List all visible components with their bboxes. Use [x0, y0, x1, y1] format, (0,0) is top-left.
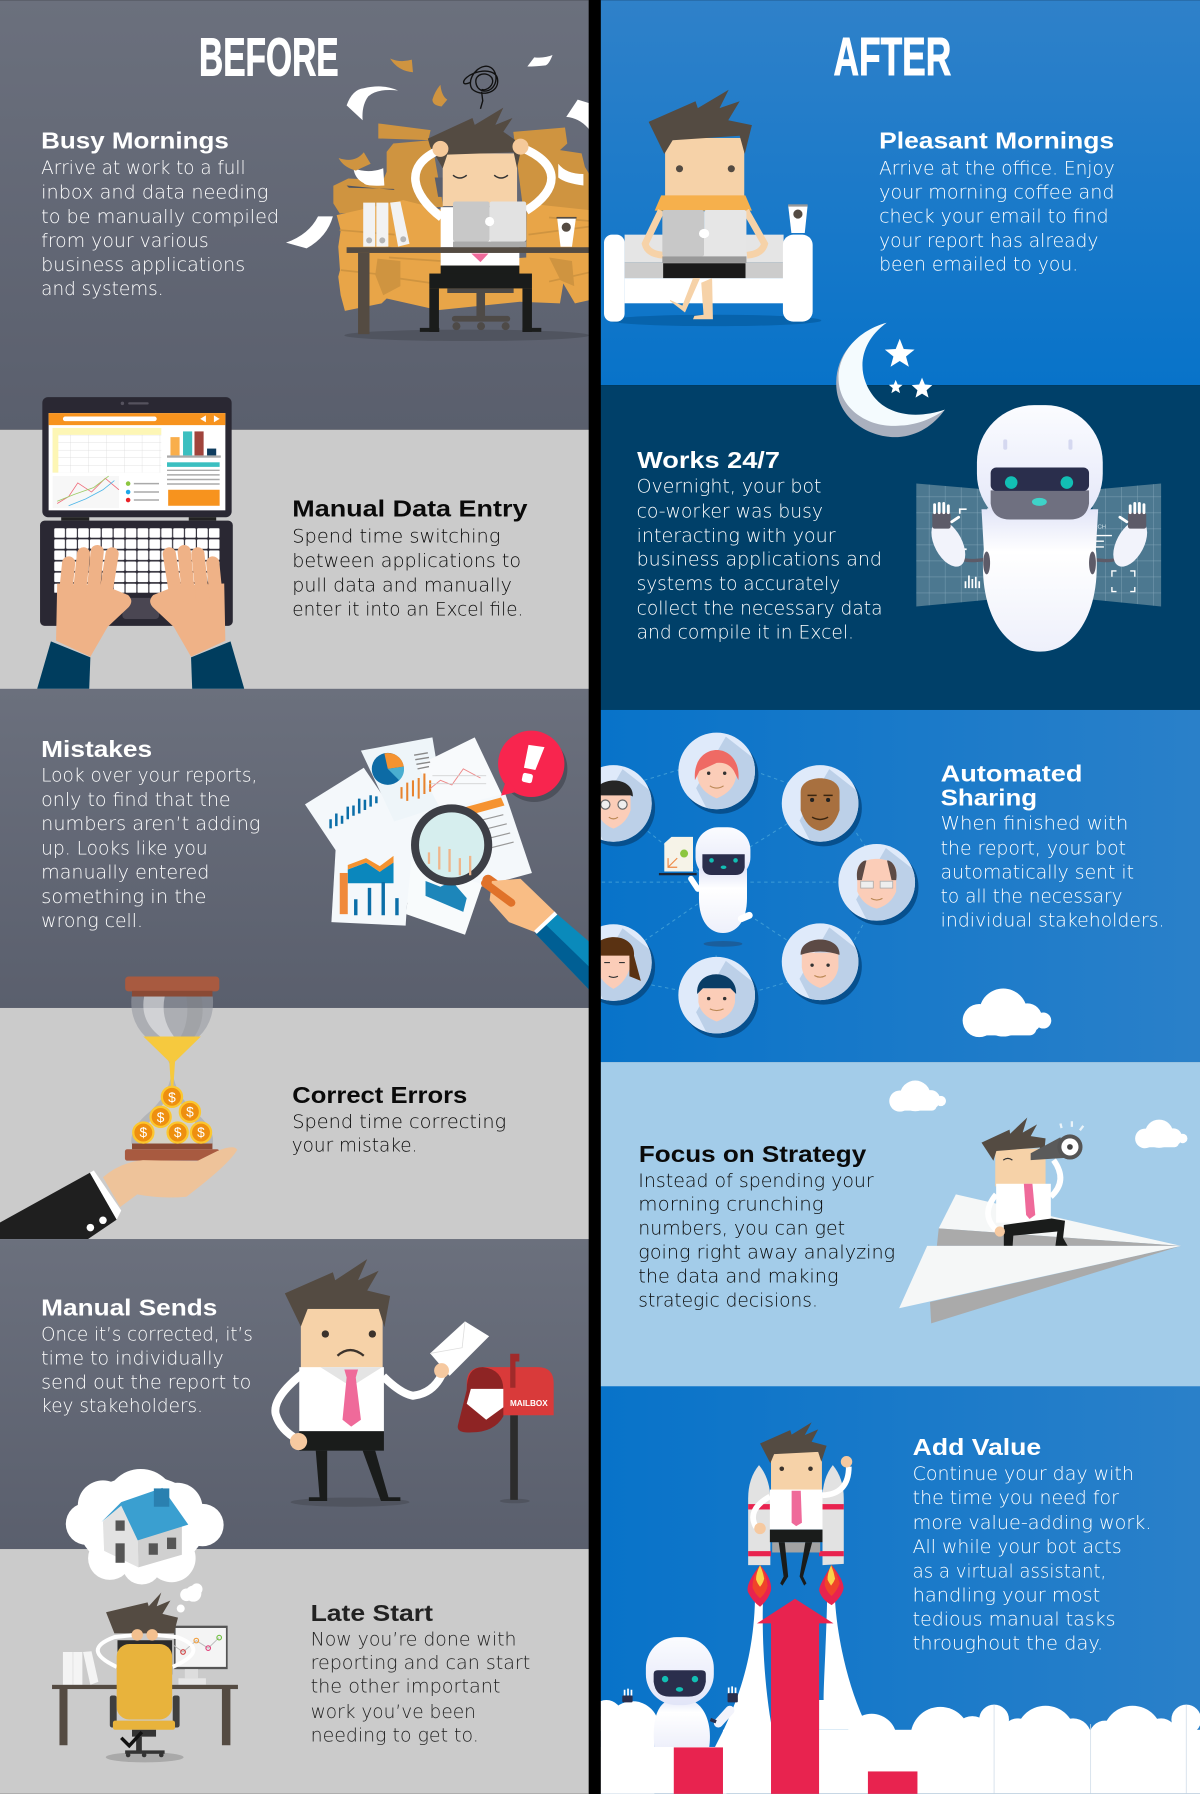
text block: focus on strategy: Focus on Strategy — [639, 1141, 866, 1167]
text block: pleasant mornings: Pleasant Mornings — [879, 128, 1114, 154]
text block: manual data entry: Spend time switching — [292, 526, 500, 547]
illustration: robot with holographic screens: SEARCH — [1081, 525, 1106, 531]
illustration: reports under magnifying glass with alert — [305, 731, 589, 990]
illustration: worried man sending envelope at mailbox: MAILBOX — [510, 1399, 548, 1408]
text block: focus on strategy: strategic decisions. — [638, 1291, 818, 1312]
text block: works 24/7: business applications and — [637, 550, 882, 571]
illustration: hands typing on laptop — [37, 397, 244, 689]
text block: manual sends: time to individually — [41, 1348, 224, 1369]
text block: automated sharing — [941, 760, 1165, 932]
text block: manual data entry — [292, 496, 527, 621]
text block: automated sharing: to all the necessary — [941, 887, 1123, 908]
sub-element: stakeholder red hair — [678, 733, 762, 817]
text block: add value: Add Value — [913, 1434, 1041, 1460]
text block: mistakes: wrong cell. — [41, 911, 143, 932]
sub-element: gold coins: $ — [186, 1105, 194, 1120]
text block: late start — [311, 1600, 530, 1747]
text block: automated sharing: Automated — [941, 760, 1083, 786]
text block: manual data entry: Manual Data Entry — [292, 496, 527, 522]
sub-element: dashed connections — [602, 769, 876, 995]
text block: automated sharing: When finished with — [941, 814, 1128, 835]
illustration: hourglass with coins held in a hand — [0, 977, 237, 1239]
text block: add value: All while your bot acts — [913, 1537, 1122, 1558]
text block: correct errors: Correct Errors — [292, 1082, 467, 1108]
text block: late start: needing to get to. — [311, 1726, 479, 1747]
text block: automated sharing: individual stakeholders. — [941, 911, 1165, 932]
sub-element: gold coins: $ — [197, 1125, 205, 1140]
text block: automated sharing: automatically sent it — [941, 862, 1134, 883]
text block: works 24/7: Works 24/7 — [637, 447, 780, 473]
text block: late start: Now you’re done with — [311, 1629, 516, 1650]
text block: pleasant mornings: your morning coffee and — [879, 183, 1115, 204]
text block: add value: handling your most — [913, 1585, 1100, 1606]
sub-element: gold coins — [133, 1087, 211, 1143]
icon: cloud right of plane — [1135, 1120, 1187, 1148]
sub-element: thought cloud with house — [66, 1469, 224, 1613]
text block: mistakes: only to find that the — [41, 790, 231, 811]
sub-element: stakeholder long brown hair — [600, 924, 656, 1006]
text block: focus on strategy: numbers, you can get — [638, 1218, 845, 1239]
text block: automated sharing: the report, your bot — [941, 839, 1126, 860]
icon: cloud above plane — [889, 1081, 946, 1112]
text block: works 24/7 — [637, 447, 883, 644]
panel: mistakes background — [0, 689, 589, 1009]
text block: focus on strategy: the data and making — [638, 1267, 839, 1288]
text block: mistakes: Look over your reports, — [41, 765, 257, 786]
text block: manual sends: key stakeholders. — [41, 1396, 203, 1417]
text block: late start: work you’ve been — [311, 1702, 476, 1723]
text block: manual sends: Manual Sends — [41, 1294, 217, 1320]
text block: pleasant mornings: been emailed to you. — [879, 255, 1078, 276]
illustration: small robot waving — [622, 1637, 738, 1747]
text block: focus on strategy: going right away analyzing — [638, 1243, 895, 1264]
text block: add value: Continue your day with — [913, 1464, 1134, 1485]
text block: works 24/7: and compile it in Excel. — [637, 623, 854, 644]
illustration: relaxed man with laptop on couch — [604, 90, 821, 326]
text block: focus on strategy: Instead of spending your — [638, 1171, 874, 1192]
text block: add value — [913, 1434, 1151, 1654]
text block: busy mornings: and systems. — [41, 279, 164, 300]
illustration: man with telescope on paper plane — [899, 1117, 1181, 1323]
text block: manual data entry: pull data and manually — [292, 576, 512, 597]
text block: correct errors: your mistake. — [292, 1136, 418, 1157]
text block: focus on strategy — [638, 1141, 895, 1312]
text block: add value: as a virtual assistant, — [913, 1561, 1106, 1582]
heading: after: AFTER — [833, 27, 951, 87]
text block: manual sends: Once it’s corrected, it’s — [41, 1325, 253, 1346]
panel: focus on strategy background — [601, 1062, 1200, 1387]
sub-element: left hand and sleeve — [37, 552, 131, 689]
text block: pleasant mornings: Arrive at the office. Enjoy — [879, 159, 1115, 180]
text block: mistakes: Mistakes — [41, 736, 152, 762]
illustration: cloud ground and exhaust trails — [590, 1599, 1200, 1794]
text block: mistakes: up. Looks like you — [41, 839, 208, 860]
panel: busy mornings background — [0, 0, 589, 430]
sub-element: stakeholder bald with glasses — [838, 844, 922, 928]
text block: focus on strategy: morning crunching — [638, 1195, 824, 1216]
text block: busy mornings: inbox and data needing — [41, 183, 268, 204]
divider: black vertical bar — [589, 0, 601, 1794]
sub-element: piles of paper — [333, 123, 590, 311]
panel: works 24/7 background — [601, 385, 1200, 710]
sub-element: gold coins: $ — [140, 1125, 148, 1140]
heading: before: BEFORE — [199, 27, 339, 87]
text block: add value: throughout the day. — [913, 1633, 1103, 1654]
text block: works 24/7: systems to accurately — [637, 574, 840, 595]
panel: manual sends background — [0, 1239, 589, 1550]
text block: correct errors: Spend time correcting — [292, 1112, 506, 1133]
sub-element: stakeholder black hair with glasses — [600, 765, 656, 846]
illustration: bot connected to stakeholders — [575, 733, 922, 1041]
text block: correct errors — [292, 1082, 506, 1157]
text block: mistakes — [41, 736, 260, 932]
text block: late start: reporting and can start — [311, 1653, 530, 1674]
panel: correct errors background — [0, 1008, 589, 1240]
text block: works 24/7: interacting with your — [637, 526, 836, 547]
icon: cloud near automated sharing — [963, 989, 1051, 1037]
sub-element: stakeholder navy hair — [678, 957, 762, 1041]
text block: add value: more value-adding work. — [913, 1513, 1151, 1534]
text block: busy mornings: business applications — [41, 255, 245, 276]
text block: busy mornings: to be manually compiled — [41, 207, 279, 228]
sub-element: stakeholder dark skin — [782, 765, 866, 849]
illustration: robot with holographic screens — [916, 405, 1161, 652]
text block: pleasant mornings: your report has already — [879, 231, 1098, 252]
sub-element: gold coins: $ — [168, 1090, 176, 1105]
illustration: stressed man at desk with paper piles — [286, 55, 590, 341]
text block: works 24/7: co-worker was busy — [637, 501, 823, 522]
text block: manual data entry: between applications to — [292, 551, 521, 572]
sub-element: gold coins: $ — [157, 1110, 165, 1125]
panel: manual data entry background — [0, 430, 589, 689]
text block: mistakes: numbers aren’t adding — [41, 814, 260, 835]
text block: pleasant mornings: check your email to find — [879, 207, 1109, 228]
text block: manual sends: send out the report to — [41, 1372, 251, 1393]
text block: busy mornings — [41, 128, 279, 300]
text block: pleasant mornings — [879, 128, 1115, 276]
text block: busy mornings: Arrive at work to a full — [41, 158, 246, 179]
sub-element: trousers and legs — [420, 266, 541, 332]
text block: add value: the time you need for — [913, 1488, 1119, 1509]
chart: red rising bars and arrow — [674, 1599, 917, 1794]
text block: mistakes: manually entered — [41, 863, 209, 884]
sub-element: gold coins: $ — [174, 1125, 182, 1140]
text block: manual sends — [41, 1294, 253, 1417]
illustration: man with jetpack — [748, 1422, 852, 1607]
panel: add value background — [601, 1386, 1200, 1794]
text block: manual data entry: enter it into an Excel file. — [292, 600, 523, 621]
sub-element: right hand and sleeve — [150, 552, 244, 689]
illustration: crescent moon and stars — [836, 323, 945, 437]
text block: automated sharing: Sharing — [941, 784, 1037, 810]
sub-element: small robot with report tray — [659, 827, 750, 947]
text block: late start: Late Start — [311, 1600, 433, 1626]
panel: late start background — [0, 1549, 589, 1794]
text block: mistakes: something in the — [41, 887, 206, 908]
text block: add value: tedious manual tasks — [913, 1609, 1115, 1630]
text block: busy mornings: Busy Mornings — [41, 128, 229, 154]
text block: works 24/7: Overnight, your bot — [637, 477, 821, 498]
text block: busy mornings: from your various — [41, 231, 209, 252]
text block: works 24/7: collect the necessary data — [637, 598, 883, 619]
text block: late start: the other important — [311, 1677, 500, 1698]
panel: pleasant mornings background — [601, 0, 1200, 385]
illustration: man at desk dreaming of home — [52, 1469, 238, 1762]
panel: automated sharing background — [601, 710, 1200, 1062]
illustration: worried man sending envelope at mailbox — [275, 1259, 554, 1507]
sub-element: stakeholder brown hair — [782, 923, 866, 1008]
